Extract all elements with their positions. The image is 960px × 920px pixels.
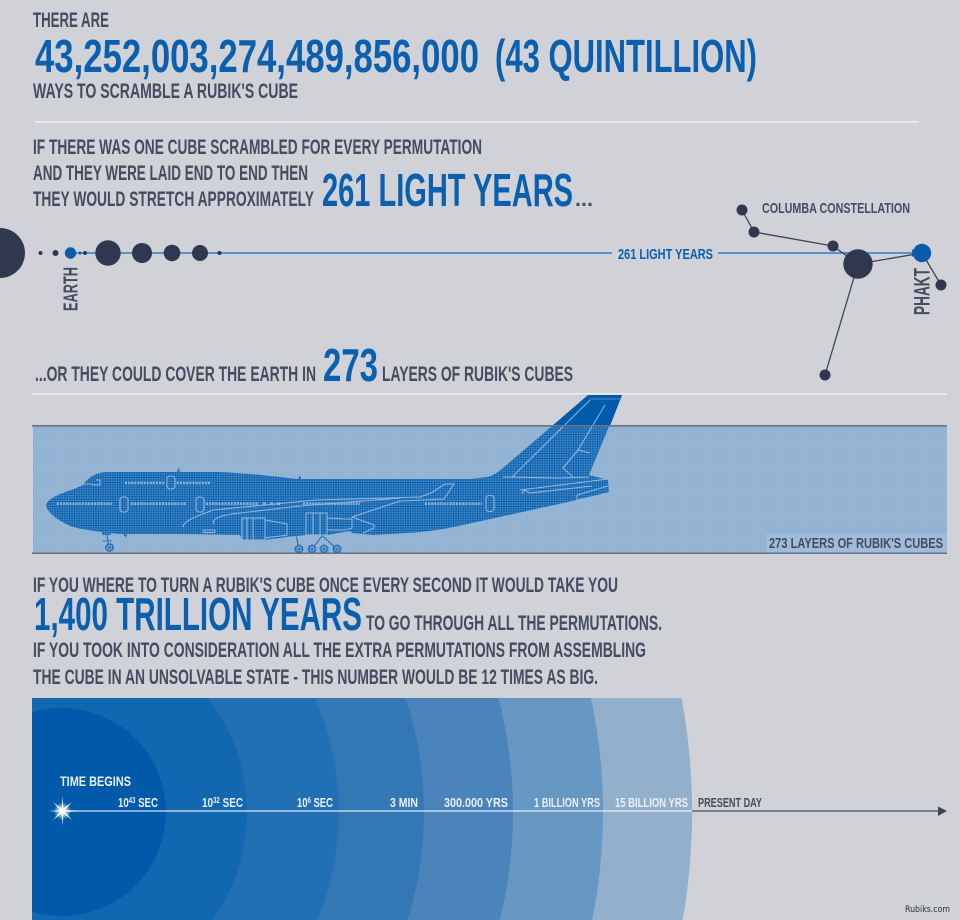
diagram: columba constellation: [736, 204, 946, 380]
labels: time marks: SEC: [135, 795, 158, 810]
label: time begins: TIME BEGINS: [60, 773, 131, 789]
text block: time to go through permutations: 1,400 TRILLION YEARS: [34, 588, 362, 640]
timeline axis: [62, 810, 692, 812]
labels: time marks: 3 MIN: [390, 795, 418, 810]
label: earth: EARTH: [60, 267, 82, 311]
text block: time to go through permutations: THE CUBE IN AN UNSOLVABLE STATE - THIS NUMBER WOULD BE 12 TIMES AS BIG.: [33, 666, 598, 689]
heading: total permutations: [33, 9, 757, 103]
tail tip shading: [553, 395, 622, 426]
small antennas: [123, 467, 301, 538]
label: 261 light years: 261 LIGHT YEARS: [618, 246, 713, 263]
doors and wing outlines: [84, 399, 621, 540]
illustration: airplane: [46, 395, 622, 553]
text block: time to go through permutations: TO GO THROUGH ALL THE PERMUTATIONS.: [366, 612, 662, 635]
labels: time marks: SEC: [220, 795, 243, 810]
label: phakt: PHAKT: [910, 268, 934, 315]
text block: light years statement: [33, 136, 593, 216]
text block: light years statement: IF THERE WAS ONE CUBE SCRAMBLED FOR EVERY PERMUTATION: [33, 136, 482, 159]
source credit: Rubiks.com: [905, 905, 950, 915]
labels: time marks: 10: [202, 795, 216, 810]
text: there are: THERE ARE: [33, 9, 109, 32]
panel: 273 layers band with airplane: [32, 395, 947, 554]
text block: time to go through permutations: IF YOU WHERE TO TURN A RUBIK'S CUBE ONCE EVERY SECOND IT WOULD TAKE YOU: [33, 574, 618, 597]
icon: big bang star: [48, 796, 78, 826]
text block: time to go through permutations: IF YOU TOOK INTO CONSIDERATION ALL THE EXTRA PERMUTATIONS FROM ASSEMBLING: [33, 639, 646, 662]
icon: arrowhead at phakt: [912, 249, 918, 257]
dot screen over band: [33, 426, 947, 553]
labels: time marks: 15 BILLION YRS: [615, 795, 688, 810]
text block: time to go through permutations: [33, 574, 662, 689]
labels: time marks: 1 BILLION YRS: [534, 795, 600, 810]
text block: light years statement: THEY WOULD STRETCH APPROXIMATELY: [33, 188, 314, 211]
icon: phakt star: [913, 244, 931, 262]
text: ways to scramble: WAYS TO SCRAMBLE A RUBIK'S CUBE: [33, 80, 298, 103]
landing gear: [102, 531, 341, 553]
labels: time marks: 43: [129, 796, 136, 805]
labels: time marks: 10: [118, 795, 132, 810]
labels: time marks: 6: [308, 796, 311, 805]
text block: cover the earth: ...OR THEY COULD COVER THE EARTH IN: [35, 363, 316, 386]
icon: earth marker: [65, 247, 76, 259]
text block: light years statement: ...: [575, 188, 593, 211]
diagram: distance line from earth to phakt: [71, 246, 918, 263]
text block: light years statement: 261 LIGHT YEARS: [322, 164, 573, 216]
text block: cover the earth: [35, 339, 573, 391]
text block: cover the earth: 273: [323, 339, 378, 391]
labels: time marks: SEC: [311, 795, 333, 810]
labels: time marks: PRESENT DAY: [698, 795, 762, 810]
text: 43 quintillion in words: (43 QUINTILLION): [495, 30, 757, 82]
labels: time marks: 10: [297, 795, 311, 810]
chart: timeline of the universe rings: [32, 698, 947, 920]
axis to present day with arrow: [692, 806, 947, 816]
labels: time marks: [118, 795, 762, 810]
text block: light years statement: AND THEY WERE LAID END TO END THEN: [33, 162, 308, 185]
text block: cover the earth: LAYERS OF RUBIK'S CUBES: [382, 363, 573, 386]
diagram: stars near earth: [0, 228, 222, 278]
windows: [57, 483, 482, 504]
number: 43 quintillion figure: 43,252,003,274,489,856,000: [35, 30, 479, 82]
labels: time marks: 300.000 YRS: [444, 795, 508, 810]
labels: time marks: 32: [213, 796, 220, 805]
